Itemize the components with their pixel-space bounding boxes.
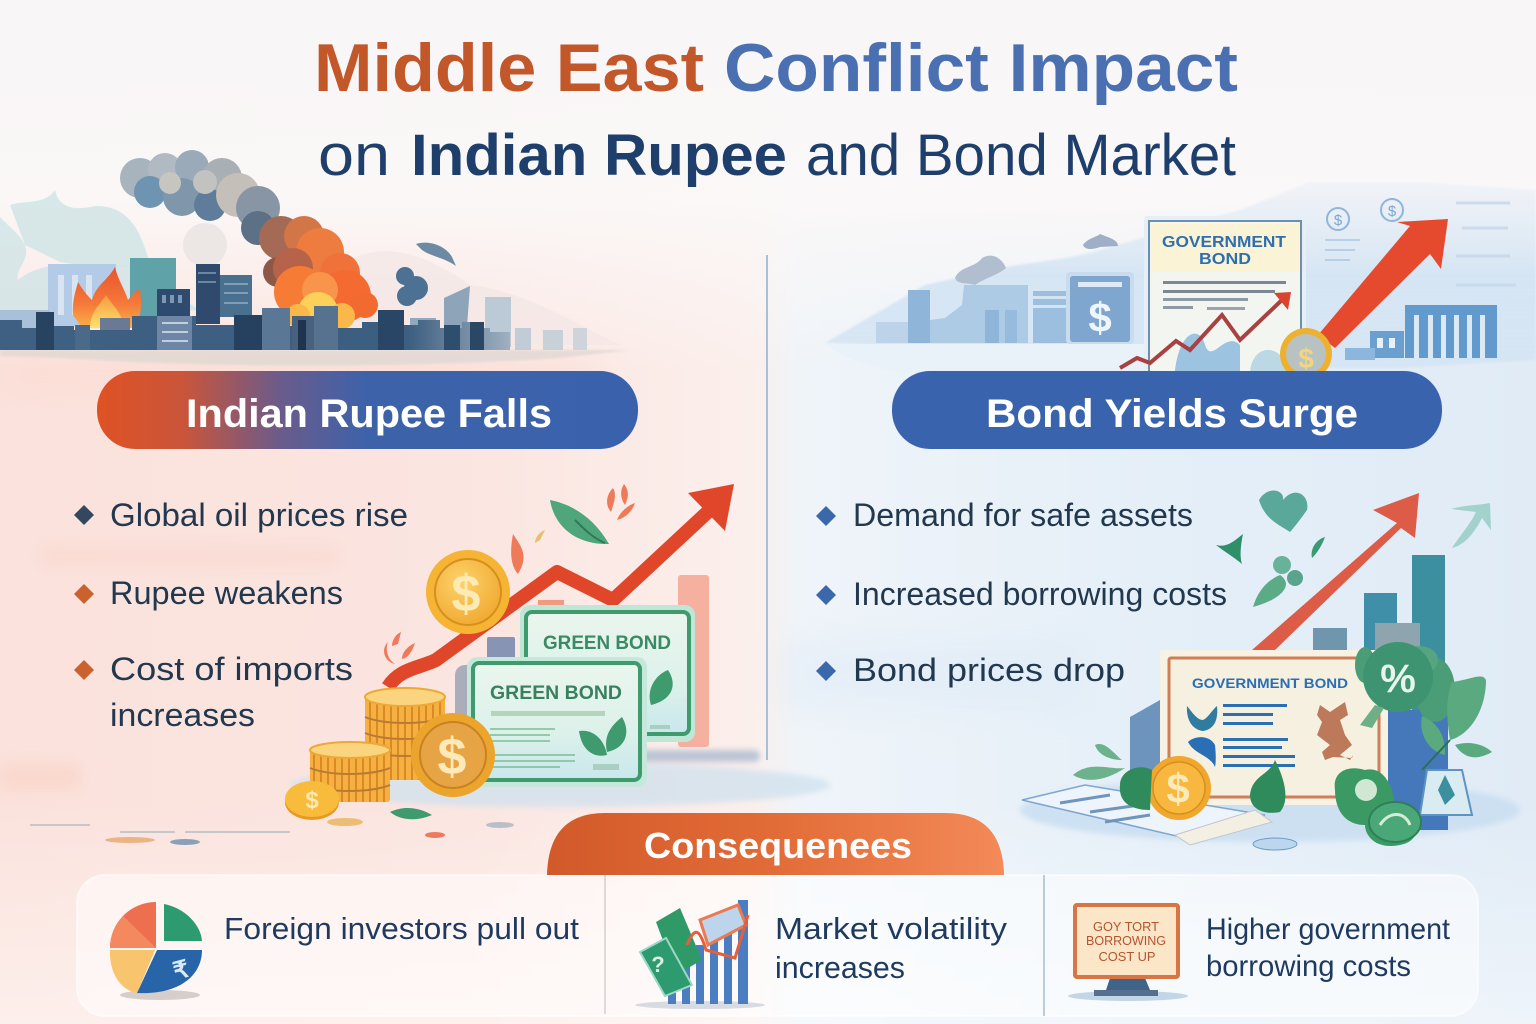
pale towers — [0, 258, 587, 350]
red trend arrow — [388, 484, 734, 687]
title line 2: Indian Rupee — [411, 123, 787, 188]
floating teal leaves — [1216, 491, 1491, 607]
bars — [1130, 555, 1448, 830]
volatility chart icon: ? — [651, 952, 665, 977]
upper coin — [426, 550, 510, 634]
title line 2 — [318, 123, 1236, 188]
bullet: rupee weakens: Rupee weakens — [110, 575, 343, 611]
right side plant — [1421, 677, 1492, 770]
title line 1: Conflict Impact — [724, 30, 1238, 106]
hazy hills — [0, 217, 200, 320]
zigzag arrow — [1120, 292, 1291, 368]
government bond document: BOND — [1199, 251, 1251, 268]
pill: Bond Yields Surge: Bond Yields Surge — [986, 392, 1358, 436]
percent badge — [1355, 642, 1455, 728]
bond city illustration — [825, 182, 1536, 380]
dollar symbols — [1325, 199, 1403, 260]
dollar card: $ — [1088, 294, 1112, 341]
bullet: bond prices: Bond prices drop — [853, 652, 1125, 688]
clouds — [955, 234, 1118, 285]
bullet: import costs: increases — [110, 697, 255, 733]
front green bond — [467, 657, 647, 787]
darker building blocks — [36, 264, 484, 350]
title line 2: and Bond Market — [806, 123, 1236, 188]
green cabbage leaves — [1120, 760, 1421, 846]
title — [314, 30, 1238, 188]
skyline — [876, 285, 1067, 343]
panel card — [77, 875, 1478, 1016]
pie chart icon: ₹ — [170, 955, 192, 986]
consequence: market volatility: Market volatility — [775, 911, 1008, 946]
bullets: rupee causes — [74, 497, 408, 733]
small coin — [285, 781, 339, 820]
dark skyline — [0, 312, 510, 350]
consequence: foreign investors — [110, 902, 579, 1000]
big rising arrow — [1318, 219, 1448, 348]
coin — [1147, 756, 1211, 820]
bank building — [1345, 305, 1497, 360]
bullet: safe assets: Demand for safe assets — [853, 497, 1193, 533]
consequence: market volatility — [635, 900, 1008, 1009]
bullet: borrowing costs: Increased borrowing costs — [853, 576, 1227, 612]
government bond document — [1144, 216, 1306, 372]
back green bond: GREEN BOND — [543, 633, 671, 654]
ground pool — [1020, 778, 1520, 842]
small coin: $ — [305, 787, 319, 814]
small jar — [1420, 770, 1472, 815]
government bond illustration — [1020, 491, 1520, 850]
ground shadow — [0, 350, 630, 366]
monitor icon: BORROWING — [1086, 934, 1166, 948]
consequence: higher government borrowing: borrowing costs — [1206, 950, 1411, 983]
tab heading — [547, 813, 1004, 875]
monitor icon — [1068, 905, 1188, 1001]
pill: Indian Rupee Falls: Indian Rupee Falls — [186, 392, 552, 436]
consequence: higher government borrowing — [1068, 905, 1451, 1001]
government bond document: GOVERNMENT — [1162, 234, 1287, 251]
tab heading: Consequenees — [644, 825, 912, 866]
front green bond: GREEN BOND — [490, 683, 622, 704]
coin: $ — [1166, 765, 1190, 812]
back green bond — [520, 605, 695, 742]
small smoke puffs — [396, 243, 456, 306]
bullets: bond causes — [816, 497, 1227, 688]
certificate — [1160, 650, 1388, 805]
panel divider — [766, 255, 768, 760]
title line 2: on — [318, 123, 390, 188]
gold coin: $ — [1298, 343, 1314, 374]
title line 1 — [314, 30, 1238, 106]
dollar symbols: $ — [1334, 212, 1343, 229]
certificate: GOVERNMENT BOND — [1192, 676, 1348, 691]
documents — [1022, 785, 1297, 850]
big fire — [259, 216, 378, 332]
pale bars — [455, 575, 709, 747]
burning city illustration — [0, 150, 630, 366]
gold coin — [1280, 328, 1332, 380]
small spatter marks — [30, 818, 514, 845]
green bonds illustration — [30, 484, 830, 845]
pie chart icon — [110, 902, 202, 1000]
pale hills — [825, 182, 1536, 368]
dollar symbols: $ — [1388, 203, 1397, 220]
rising arrow — [1252, 493, 1419, 650]
consequence: higher government borrowing: Higher government — [1206, 913, 1451, 946]
consequence: market volatility: increases — [775, 950, 905, 985]
pill: Bond Yields Surge — [892, 371, 1442, 449]
percent badge: % — [1380, 657, 1416, 701]
bullet: import costs — [74, 651, 353, 733]
consequence: foreign investors: Foreign investors pull out — [224, 911, 579, 946]
small fire — [73, 267, 141, 328]
upper coin: $ — [452, 565, 481, 623]
title line 1: Middle East — [314, 30, 704, 106]
bullet: oil prices: Global oil prices rise — [110, 497, 408, 533]
ground shadow — [290, 763, 830, 807]
smoke plume — [120, 150, 280, 267]
coin stacks — [310, 688, 445, 802]
bullet: import costs: Cost of imports — [110, 651, 353, 687]
floating leaf and embers — [384, 484, 635, 819]
front coin: $ — [438, 728, 467, 786]
consequences panel — [77, 813, 1478, 1016]
dollar card — [1066, 272, 1134, 344]
pill: Indian Rupee Falls — [97, 371, 638, 449]
front coin — [411, 713, 495, 797]
left leaves — [1073, 744, 1125, 780]
faded annotations — [1456, 203, 1516, 285]
monitor icon: GOY TORT — [1093, 920, 1159, 934]
monitor icon: COST UP — [1098, 950, 1156, 964]
volatility chart icon — [635, 900, 765, 1009]
column dividers — [605, 875, 1044, 1016]
